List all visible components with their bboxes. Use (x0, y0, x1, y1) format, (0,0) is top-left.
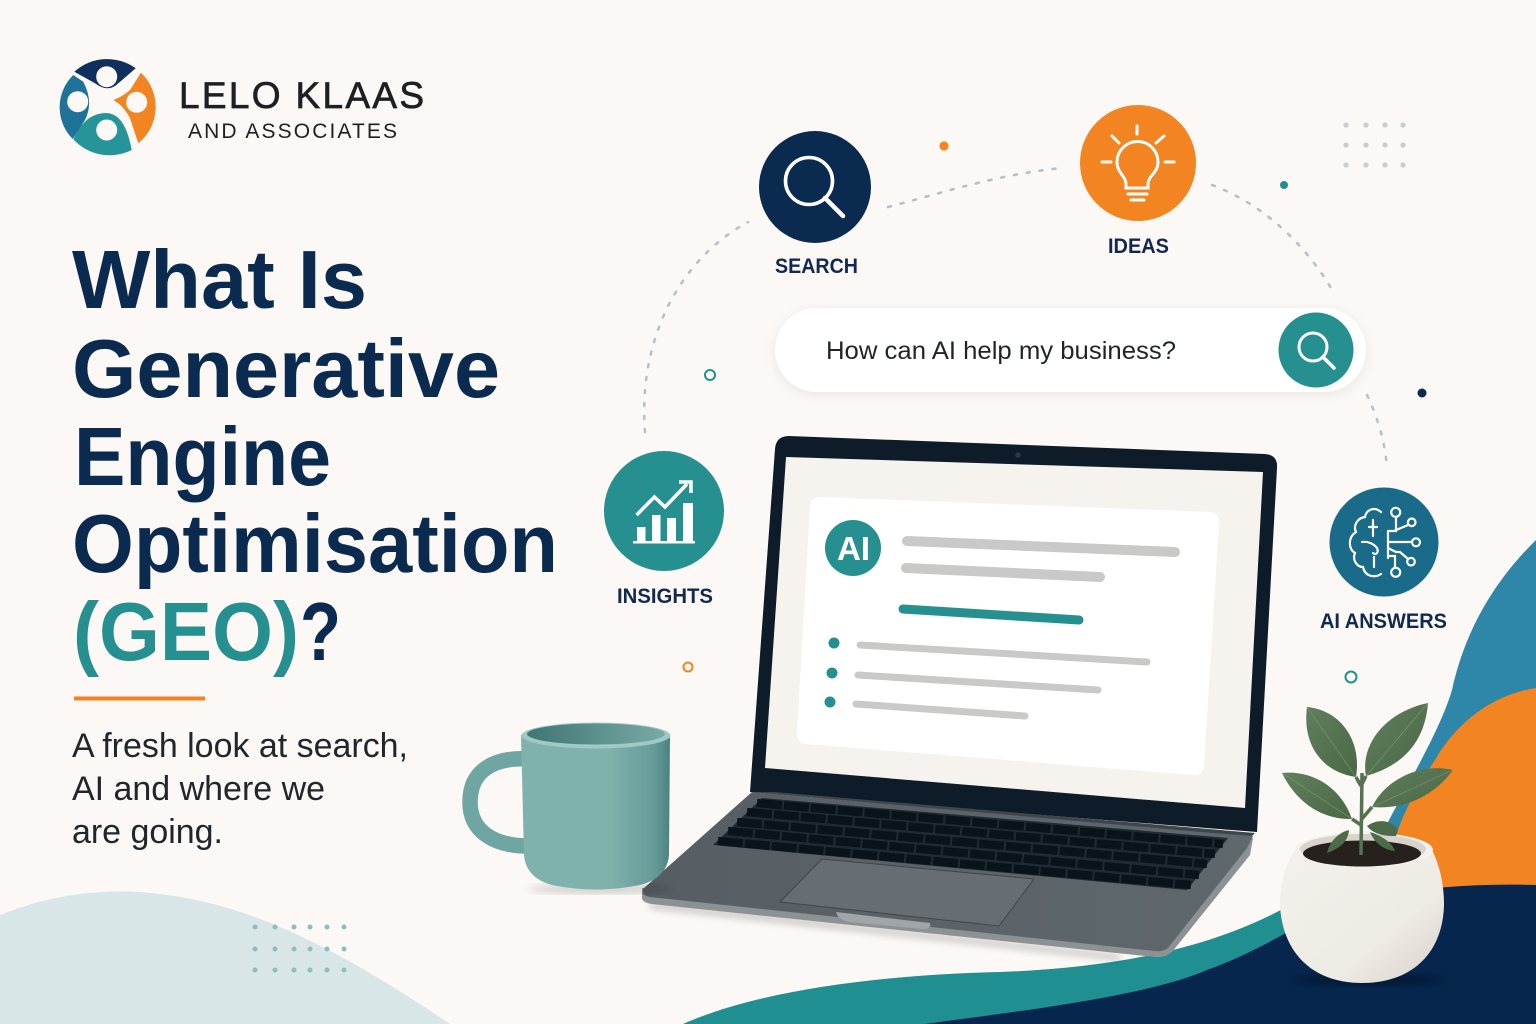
logo wordmark: LELO KLAAS (179, 75, 424, 116)
logo mark (60, 59, 156, 155)
search node (759, 131, 871, 278)
laptop screen (765, 457, 1263, 808)
trackpad (780, 859, 1034, 926)
search bar (775, 308, 1366, 392)
laptop base (642, 792, 1255, 957)
title: (GEO) (73, 585, 299, 678)
title: ? (300, 585, 341, 678)
answer card (797, 497, 1219, 775)
AI badge: AI (837, 530, 870, 567)
subtitle: are going. (72, 813, 223, 851)
laptop lid (750, 436, 1277, 832)
search query: How can AI help my business? (826, 337, 1176, 365)
bottom-left dot grid (252, 924, 346, 972)
pot (1280, 848, 1444, 983)
icon: bar chart with arrow (604, 451, 724, 571)
title: Optimisation (72, 497, 558, 590)
subtitle: A fresh look at search, (72, 727, 408, 765)
pot rim (1295, 832, 1433, 868)
mug shadow (528, 884, 672, 894)
orange divider (74, 696, 205, 700)
front notch (836, 912, 930, 929)
subtitle (72, 727, 408, 851)
mug handle (470, 759, 528, 846)
soil (1303, 840, 1421, 866)
background wave: pale bottom-left blob (0, 891, 450, 1024)
laptop shadow (650, 902, 1120, 960)
leaves (1282, 703, 1453, 819)
coffee mug (470, 722, 672, 894)
laptop (642, 436, 1277, 960)
subtitle: AI and where we (72, 770, 325, 808)
logo tagline: AND ASSOCIATES (188, 120, 397, 143)
keyboard (713, 798, 1228, 890)
leaf veins (1282, 703, 1453, 819)
pot shadow (1292, 974, 1444, 986)
logo (60, 59, 424, 155)
search button (1278, 312, 1354, 388)
stem (1352, 773, 1372, 855)
label: AI answers: AI ANSWERS (1320, 610, 1447, 633)
small leaves (1327, 821, 1398, 853)
label: search: SEARCH (775, 255, 858, 278)
bullets (824, 638, 840, 708)
webcam (1015, 452, 1021, 458)
title (72, 233, 558, 678)
text lines (856, 541, 1175, 716)
insights node (604, 451, 724, 608)
label: insights: INSIGHTS (617, 585, 713, 608)
mug opening (527, 724, 665, 744)
icon: search (759, 131, 871, 243)
ideas node (1080, 105, 1196, 258)
potted plant (1280, 703, 1453, 986)
AI answers node (1320, 488, 1447, 633)
background waves: bottom-right (683, 540, 1536, 1024)
AI badge (825, 520, 881, 576)
icon: brain circuit (1330, 488, 1438, 596)
icon: light bulb (1080, 105, 1196, 221)
dotted connector paths (644, 168, 1387, 468)
mug rim (522, 722, 670, 748)
top-right dot grid (1343, 122, 1406, 168)
title: Generative (72, 322, 500, 415)
title: Engine (74, 410, 331, 503)
accent dots (684, 141, 1426, 682)
pot inner wall (1300, 834, 1426, 864)
label: ideas: IDEAS (1108, 235, 1169, 258)
title: What Is (72, 233, 367, 326)
mug body (521, 735, 670, 890)
